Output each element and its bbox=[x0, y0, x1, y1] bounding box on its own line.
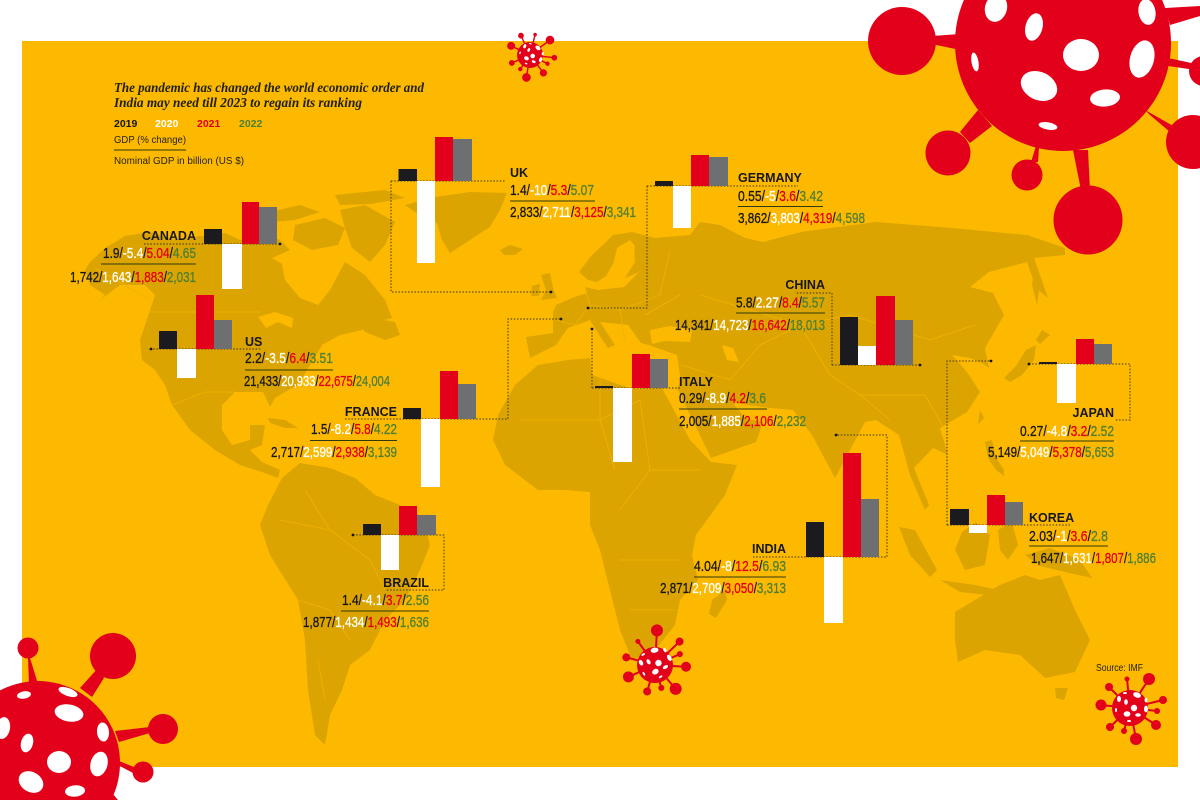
China values: 5.8/2.27/8.4/5.57 bbox=[736, 294, 825, 312]
Brazil values: 1,877/1,434/1,493/1,636 bbox=[303, 614, 429, 631]
Italy values bbox=[679, 390, 806, 430]
Germany bars bbox=[655, 155, 728, 228]
virus: top right large bbox=[868, 0, 1200, 254]
China values bbox=[675, 294, 825, 334]
Brazil values bbox=[303, 592, 429, 631]
legend: units: Nominal GDP in billion (US $) bbox=[114, 156, 244, 167]
India values bbox=[660, 558, 786, 597]
Korea label: KOREA bbox=[1029, 511, 1074, 525]
legend: units: GDP (% change) bbox=[114, 135, 186, 146]
country: US bbox=[159, 295, 390, 390]
legend: years: 2020 bbox=[155, 118, 179, 130]
Canada label: CANADA bbox=[142, 229, 196, 243]
legend: years: 2019 bbox=[114, 118, 138, 130]
UK values: 2,833/2,711/3,125/3,341 bbox=[510, 204, 636, 221]
country: Japan bbox=[988, 339, 1114, 461]
US values bbox=[244, 350, 390, 390]
country: India bbox=[660, 453, 879, 623]
virus: top small bbox=[498, 23, 564, 89]
China bars bbox=[840, 296, 913, 365]
Italy bars bbox=[595, 354, 668, 462]
US bars bbox=[159, 295, 232, 378]
US values: 21,433/20,933/22,675/24,004 bbox=[244, 373, 390, 390]
India label: INDIA bbox=[752, 542, 786, 556]
UK values: 1.4/-10/5.3/5.07 bbox=[510, 182, 594, 199]
Brazil bars bbox=[363, 506, 436, 570]
UK label: UK bbox=[510, 166, 528, 180]
legend: years bbox=[114, 118, 263, 130]
Germany values bbox=[738, 188, 865, 227]
Korea bars bbox=[950, 495, 1023, 533]
legend: units bbox=[114, 135, 244, 167]
country: UK bbox=[398, 137, 636, 263]
legend: years: 2021 bbox=[197, 118, 221, 130]
France values bbox=[271, 421, 397, 461]
Canada bars bbox=[204, 202, 277, 289]
source note: Source: IMF bbox=[1096, 663, 1143, 674]
France values: 2,717/2,599/2,938/3,139 bbox=[271, 444, 397, 461]
country: China bbox=[675, 278, 913, 365]
Japan bars bbox=[1039, 339, 1112, 403]
UK values bbox=[510, 182, 636, 221]
Korea values: 1,647/1,631/1,807/1,886 bbox=[1031, 550, 1156, 567]
France bars bbox=[403, 371, 476, 487]
Germany label: GERMANY bbox=[738, 171, 803, 185]
Japan values: 5,149/5,049/5,378/5,653 bbox=[988, 444, 1114, 461]
country: France bbox=[271, 371, 476, 487]
title: India may need till 2023 to regain its ranking bbox=[113, 95, 362, 110]
Germany values: 3,862/3,803/4,319/4,598 bbox=[738, 210, 865, 227]
Japan label: JAPAN bbox=[1073, 406, 1114, 420]
India values: 4.04/-8/12.5/6.93 bbox=[694, 558, 786, 575]
Japan values bbox=[988, 423, 1114, 461]
Canada values: 1,742/1,643/1,883/2,031 bbox=[70, 269, 196, 286]
country: Canada bbox=[70, 202, 277, 289]
country: Italy bbox=[595, 354, 806, 462]
world map bbox=[85, 190, 1092, 745]
country: Brazil bbox=[303, 506, 436, 631]
Japan values: 0.27/-4.8/3.2/2.52 bbox=[1020, 423, 1114, 440]
country: Korea bbox=[950, 495, 1156, 567]
UK bars bbox=[398, 137, 472, 263]
virus: bottom left large bbox=[0, 633, 178, 800]
China values: 14,341/14,723/16,642/18,013 bbox=[675, 317, 825, 334]
India values: 2,871/2,709/3,050/3,313 bbox=[660, 580, 786, 597]
country: Germany bbox=[655, 155, 865, 228]
virus: bottom right small bbox=[1096, 673, 1167, 745]
India bars bbox=[806, 453, 879, 623]
Brazil label: BRAZIL bbox=[383, 576, 429, 590]
virus: southern Africa small bbox=[608, 616, 706, 714]
France label: FRANCE bbox=[345, 405, 397, 419]
Korea values: 2.03/-1/3.6/2.8 bbox=[1029, 528, 1108, 545]
France values: 1.5/-8.2/5.8/4.22 bbox=[311, 421, 397, 438]
China label: CHINA bbox=[785, 278, 825, 292]
connector lines bbox=[144, 181, 1130, 590]
Canada values: 1.9/-5.4/5.04/4.65 bbox=[103, 245, 196, 262]
Germany values: 0.55/-5/3.6/3.42 bbox=[738, 188, 823, 205]
Canada values bbox=[70, 245, 196, 286]
Brazil values: 1.4/-4.1/3.7/2.56 bbox=[342, 592, 429, 609]
Italy values: 0.29/-8.9/4.2/3.6 bbox=[679, 390, 766, 407]
Italy label: ITALY bbox=[679, 375, 714, 389]
Italy values: 2,005/1,885/2,106/2,232 bbox=[679, 413, 806, 430]
US label: US bbox=[245, 335, 262, 349]
US values: 2.2/-3.5/6.4/3.51 bbox=[245, 350, 333, 367]
legend: years: 2022 bbox=[239, 118, 263, 130]
title: The pandemic has changed the world economic order and bbox=[114, 80, 424, 95]
Korea values bbox=[1029, 528, 1156, 567]
